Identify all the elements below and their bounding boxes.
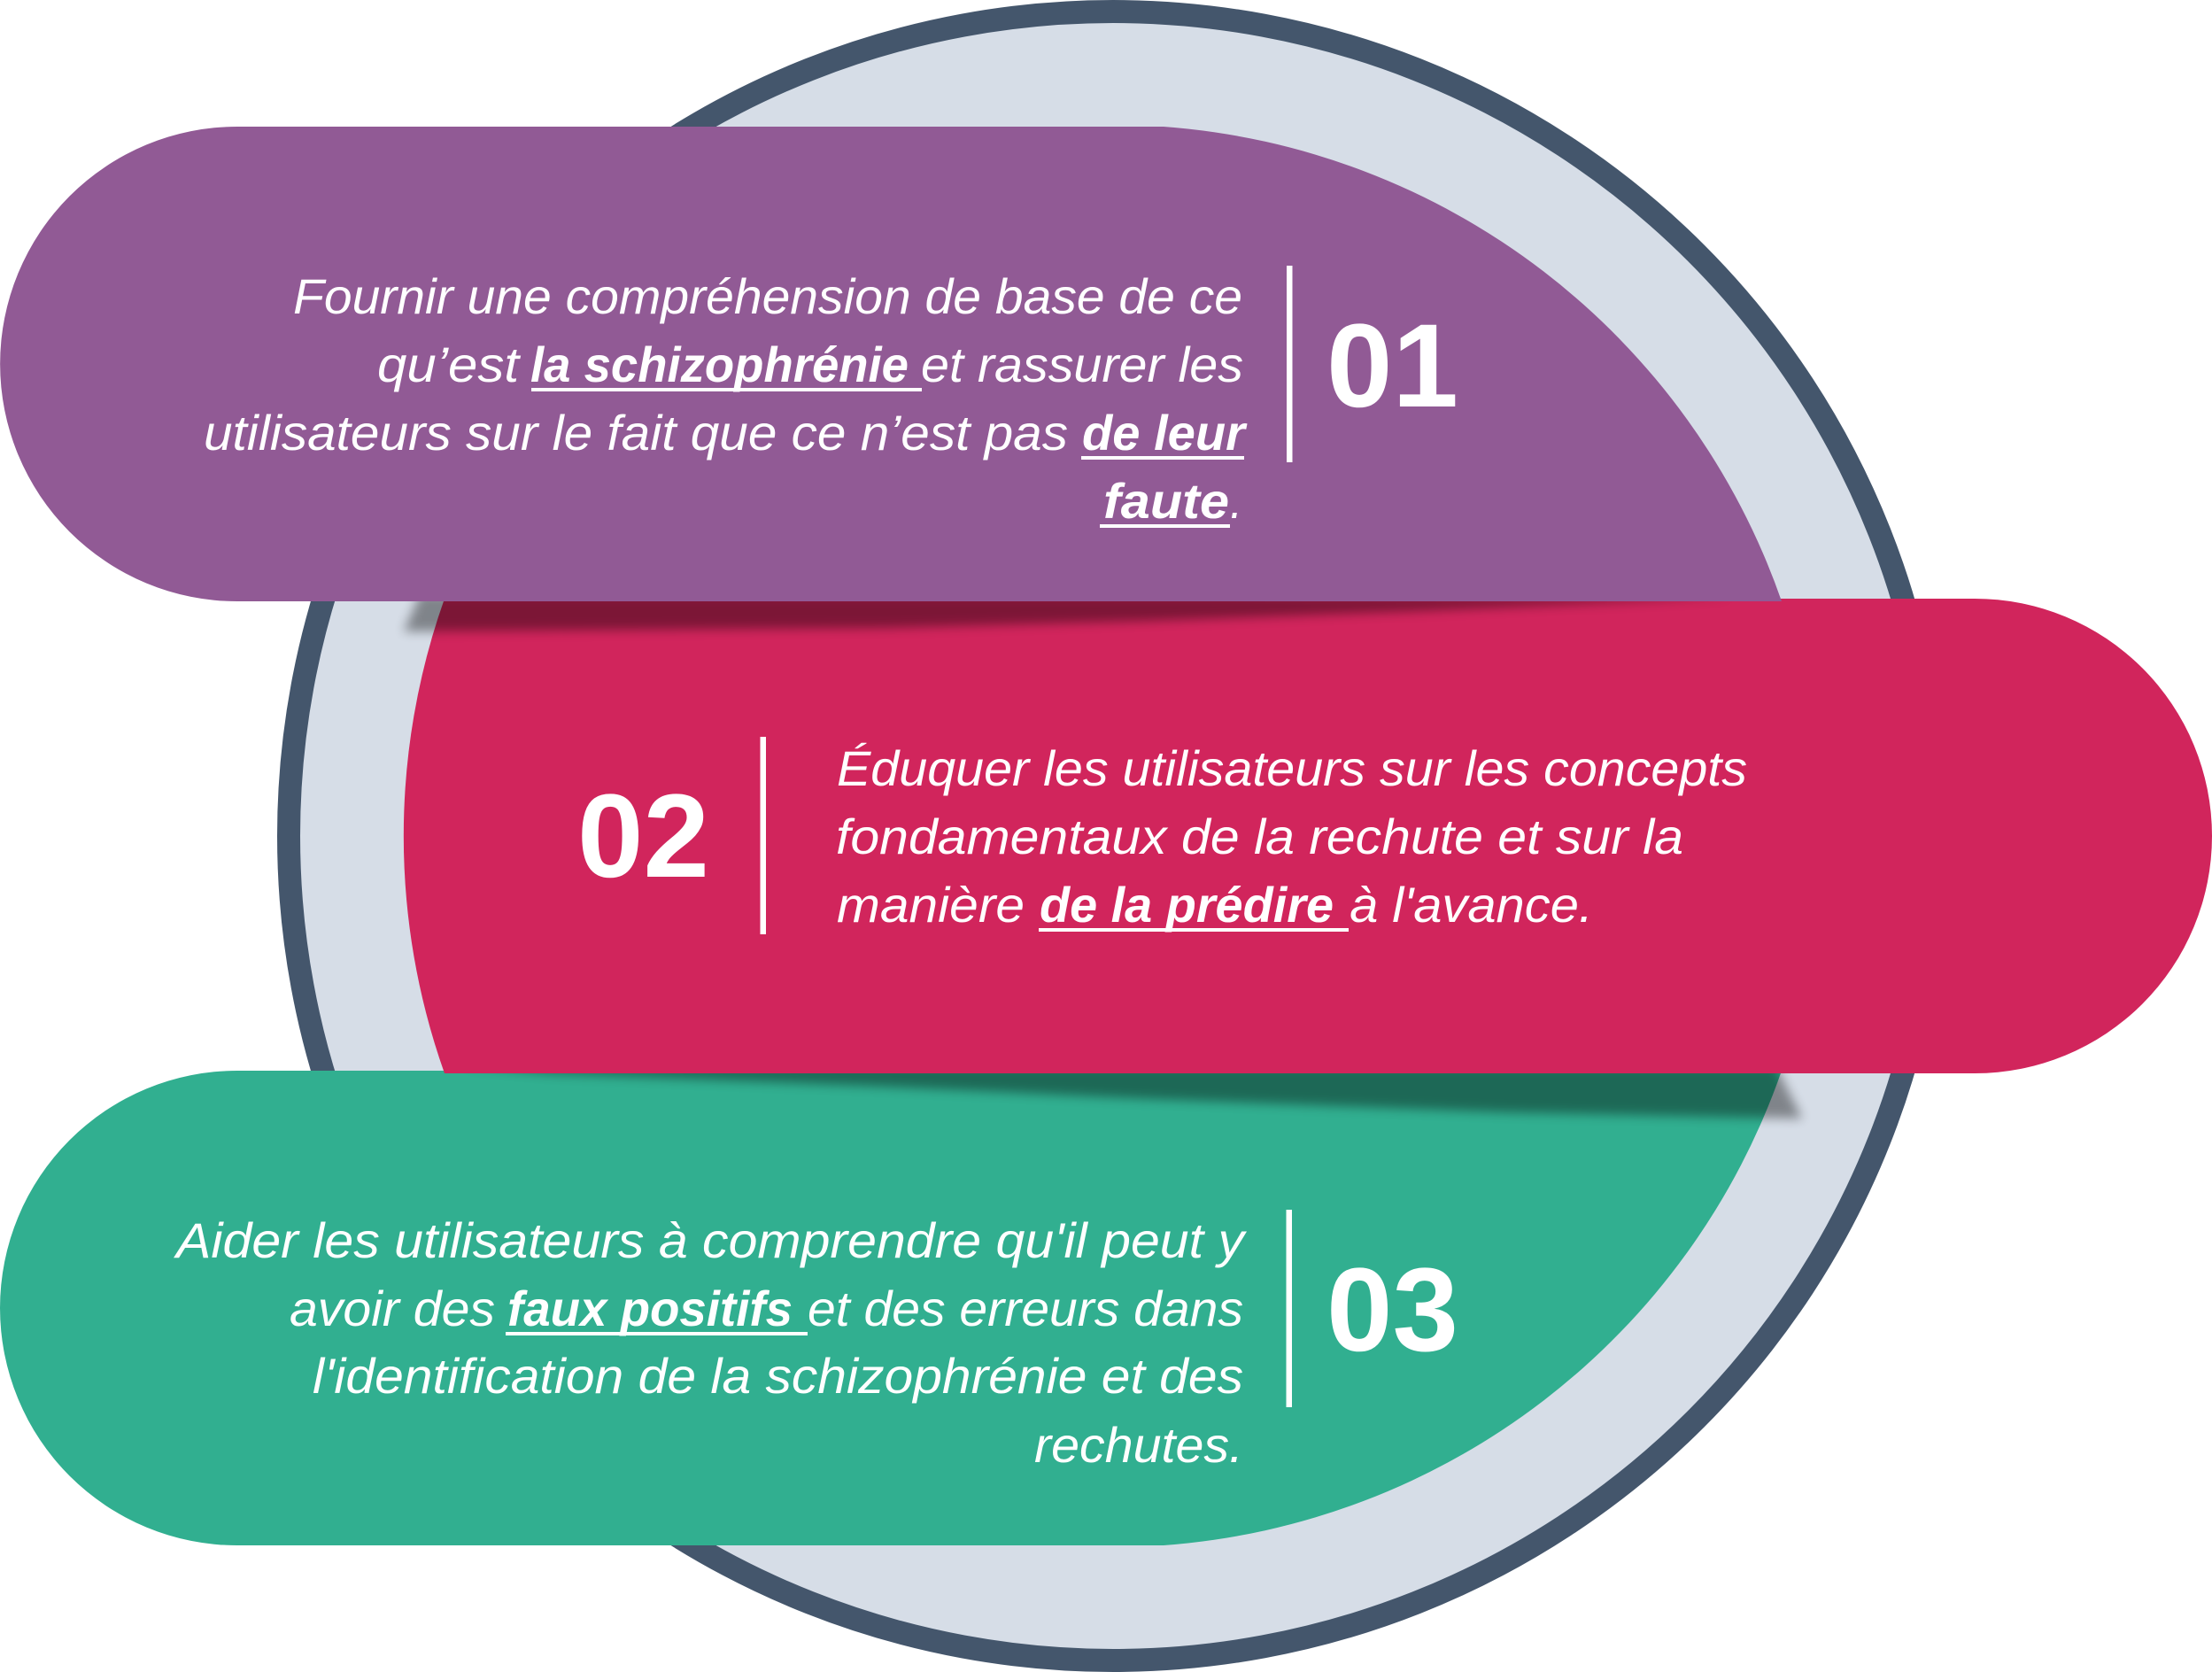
text block 01: faute bbox=[1103, 473, 1229, 529]
divider 02 bbox=[760, 737, 766, 934]
shadow of purple band bbox=[404, 593, 1736, 631]
text block 01: qu’est bbox=[377, 337, 522, 392]
text block 03: Aider les utilisateurs à comprendre qu'il peut y bbox=[174, 1212, 1247, 1268]
text block 01: utilisateurs sur le fait que ce n’est pas bbox=[204, 405, 1068, 461]
text block 01: et rassurer les bbox=[921, 337, 1243, 392]
divider 03 bbox=[1286, 1210, 1292, 1407]
green band shape bbox=[0, 1071, 1782, 1545]
purple band shape bbox=[0, 127, 1782, 601]
panel: 03 green band bbox=[0, 1071, 1782, 1545]
shadow of red band bbox=[460, 1065, 1802, 1119]
text block 03: et des erreurs dans bbox=[808, 1281, 1243, 1336]
panel: 02 red band bbox=[404, 599, 2212, 1119]
text block 03: avoir des bbox=[290, 1281, 495, 1336]
text block 02: à l'avance. bbox=[1350, 877, 1593, 933]
text block 02: de la prédire bbox=[1040, 877, 1334, 933]
text block 02: fondamentaux de la rechute et sur la bbox=[836, 809, 1683, 864]
background circle bbox=[289, 12, 1937, 1660]
number 01: 01 bbox=[1326, 300, 1458, 432]
text block 02: Éduquer les utilisateurs sur les concepts bbox=[837, 740, 1747, 796]
red band shape bbox=[404, 599, 2212, 1073]
text block 01: . bbox=[1230, 473, 1242, 529]
text block 01: la schizophrénie bbox=[530, 337, 909, 392]
text block 02: manière bbox=[837, 877, 1025, 933]
text block 01: de leur bbox=[1082, 405, 1248, 461]
text block 03: rechutes. bbox=[1034, 1417, 1243, 1473]
number 02: 02 bbox=[577, 770, 709, 902]
text block 03: l'identification de la schizophrénie et des bbox=[313, 1348, 1243, 1404]
divider 01 bbox=[1287, 266, 1293, 462]
panel: 01 purple band bbox=[0, 127, 1782, 631]
text block 01: Fournir une compréhension de base de ce bbox=[293, 268, 1242, 324]
text block 03 bbox=[174, 1212, 1247, 1473]
text block 03: faux positifs bbox=[507, 1281, 793, 1336]
text block 01 bbox=[204, 268, 1248, 529]
number 03: 03 bbox=[1326, 1244, 1458, 1376]
text block 02 bbox=[836, 740, 1747, 933]
